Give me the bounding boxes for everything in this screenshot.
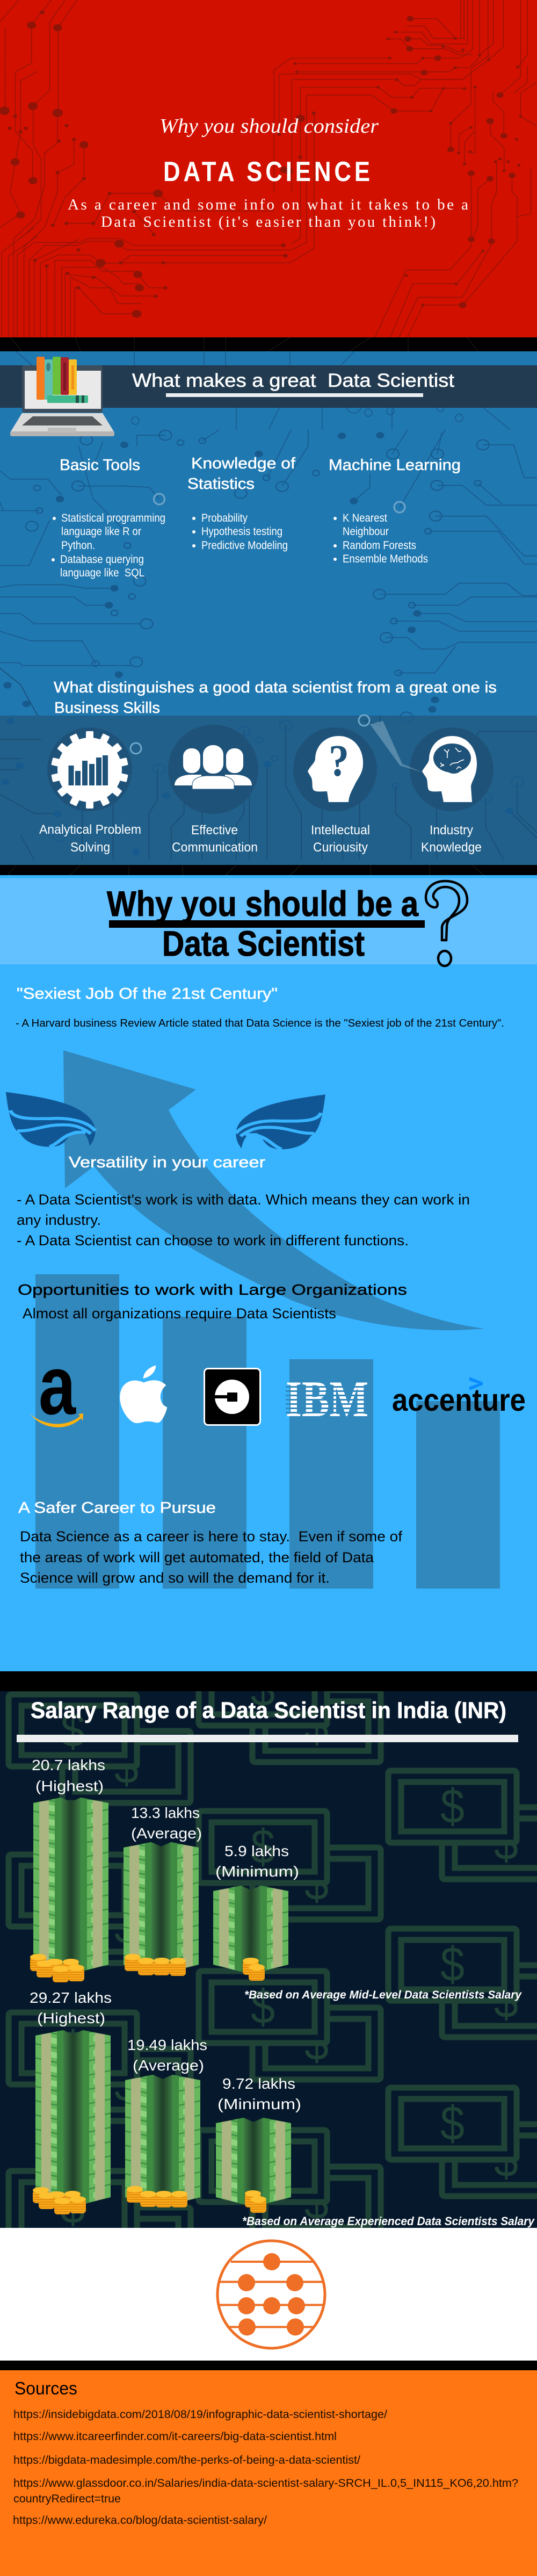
salary labels: experienced: 29.27 lakhs: [30, 1989, 112, 2006]
stack: 5.9 lakhs minimum: [213, 1886, 288, 1972]
panel: salary range: $: [494, 1974, 518, 2028]
salary labels: mid-level: 5.9 lakhs: [224, 1843, 289, 1859]
icon label: analytical problem solving: Analytical Problem: [39, 822, 141, 837]
column: knowledge of statistics: Predictive Modeling: [201, 539, 288, 552]
icon: people group: [175, 745, 252, 789]
stack: 19.49 lakhs average: [125, 2075, 200, 2204]
icon label: effective communication: Communication: [172, 840, 258, 855]
chart: mid-level salary money stacks: [30, 1798, 288, 1982]
decorative translucent sliver: [370, 721, 423, 773]
panel: what makes a great data scientist: [0, 351, 537, 865]
column: knowledge of statistics: Hypothesis testing: [201, 525, 282, 538]
panel: salary range: $: [251, 1980, 275, 2034]
safer career block: the areas of work will get automated, the field of Data: [20, 1549, 374, 1565]
panel: salary range: $: [114, 1900, 139, 1954]
panel: salary range: $: [304, 2017, 329, 2070]
column: basic tools: language like R or: [61, 525, 141, 538]
icon: head with question mark: ?: [329, 736, 349, 786]
sources heading: Sources: [14, 2378, 77, 2398]
safer career block: [18, 1499, 403, 1586]
heading: business skills: What distinguishes a good data scientist from a great one is: [54, 679, 497, 696]
salary labels: experienced: [30, 1989, 301, 2112]
logo: accenture: accenture: [392, 1383, 526, 1418]
versatility block: any industry.: [17, 1212, 101, 1228]
hero subtitle: As a career and some info on what it takes to be a: [68, 196, 468, 213]
salary labels: mid-level: (Minimum): [215, 1863, 299, 1880]
icon label: industry knowledge: [421, 823, 482, 855]
column: knowledge of statistics: [187, 455, 296, 552]
column: machine learning: Neighbour: [343, 525, 389, 538]
icon: head with brain: [422, 736, 477, 802]
icon label: industry knowledge: Industry: [430, 823, 473, 838]
icon: left wing: [6, 1092, 95, 1147]
column: basic tools: Python.: [61, 539, 95, 552]
panel: salary range: [0, 1691, 537, 2228]
logo: apple: [120, 1365, 167, 1423]
panel: salary range: $: [304, 2176, 329, 2229]
panel: sources: [0, 2370, 537, 2576]
icon: head with question mark: [308, 736, 363, 802]
sexiest job block: - A Harvard business Review Article stated that Data Science is the "Sexiest job of the 21st Century".: [16, 1018, 504, 1029]
opportunities block: Almost all organizations require Data Scientists: [23, 1305, 336, 1322]
icon: gear with bar chart: [51, 731, 128, 809]
source links: https://www.edureka.co/blog/data-scientist-salary/: [13, 2514, 267, 2527]
panel: why you should be a data scientist: [0, 875, 537, 1671]
icon: abacus globe: [217, 2241, 325, 2348]
versatility block: Versatility in your career: [69, 1154, 265, 1171]
source links: https://www.glassdoor.co.in/Salaries/india-data-scientist-salary-SRCH_IL.0,5_IN115_KO6,20.htm?: [13, 2477, 518, 2490]
column: knowledge of statistics: Statistics: [187, 475, 255, 493]
icon label: effective communication: [172, 823, 258, 855]
column: basic tools: language like SQL: [60, 567, 144, 579]
icon: right wing: [236, 1094, 325, 1149]
header band with heading: What makes a great Data Scientist: [132, 370, 454, 391]
panel: salary range: $: [494, 2133, 518, 2187]
column: machine learning: [329, 457, 461, 565]
icon: laptop with books: [10, 357, 114, 436]
hero kicker: Why you should consider: [159, 115, 379, 138]
stack: 9.72 lakhs minimum: [216, 2118, 291, 2204]
source links: https://insidebigdata.com/2018/08/19/infographic-data-scientist-shortage/: [13, 2408, 387, 2421]
salary labels: experienced: 9.72 lakhs: [222, 2075, 295, 2092]
panel: salary range: $: [494, 1816, 518, 1870]
panel: salary range: $: [61, 1864, 85, 1917]
panel: salary range: $: [61, 2022, 85, 2075]
safer career block: Data Science as a career is here to stay. Even if some of: [20, 1528, 403, 1545]
salary labels: experienced: (Average): [133, 2057, 204, 2074]
coins: mid-level stacks: [30, 1954, 265, 1982]
panel: salary range: $: [114, 2058, 139, 2112]
salary labels: experienced: (Highest): [37, 2010, 105, 2026]
stack: 13.3 lakhs average: [124, 1842, 199, 1972]
panel: salary range: $: [440, 1938, 465, 1991]
panel: salary range: $: [114, 2217, 139, 2270]
stack: 20.7 lakhs highest: [33, 1798, 108, 1972]
column: machine learning: Ensemble Methods: [343, 553, 428, 565]
panel: salary range: $: [440, 2097, 465, 2151]
source links: countryRedirect=true: [13, 2493, 121, 2505]
opportunities block: [18, 1281, 407, 1322]
icon label: effective communication: Effective: [191, 823, 238, 838]
stack: 29.27 lakhs highest: [35, 2030, 111, 2204]
versatility block: - A Data Scientist can choose to work in different functions.: [17, 1232, 409, 1249]
icon label: intellectual curiousity: Curiousity: [313, 840, 368, 855]
salary labels: mid-level: [32, 1757, 299, 1880]
panel: red hero header: [0, 0, 537, 337]
heading: business skills: [54, 679, 497, 717]
source links: https://bigdata-madesimple.com/the-perks-of-being-a-data-scientist/: [13, 2454, 360, 2466]
logo: amazon: a: [39, 1339, 76, 1432]
panel: salary range: $: [61, 1704, 85, 1757]
salary labels: experienced: 19.49 lakhs: [127, 2037, 207, 2053]
panel: salary range: $: [61, 2180, 85, 2234]
salary labels: mid-level: 20.7 lakhs: [32, 1757, 105, 1773]
icon circles backdrop: [47, 725, 494, 814]
opportunities block: Opportunities to work with Large Organizations: [18, 1281, 407, 1298]
hero subtitle: [68, 196, 468, 230]
heading band: Why you should be a: [107, 884, 419, 923]
column: basic tools: Database querying: [60, 553, 144, 566]
panel: salary range: $: [304, 1857, 329, 1910]
safer career block: A Safer Career to Pursue: [18, 1499, 216, 1517]
column: basic tools: [52, 457, 165, 579]
sexiest job block: "Sexiest Job Of the 21st Century": [17, 985, 278, 1002]
header band with heading: [0, 365, 537, 408]
icon label: industry knowledge: Knowledge: [421, 840, 482, 855]
panel: salary range: $: [114, 1740, 139, 1794]
icon label: intellectual curiousity: [311, 823, 370, 855]
source links: https://www.itcareerfinder.com/it-careers/big-data-scientist.html: [13, 2430, 337, 2443]
decorative chart: arrow and bars: [35, 1050, 500, 1589]
column: knowledge of statistics: Knowledge of: [191, 455, 296, 472]
column: basic tools: Statistical programming: [61, 512, 165, 524]
column: knowledge of statistics: Probability: [201, 512, 248, 524]
logo: uber: [204, 1369, 260, 1425]
icon: question mark outline: [426, 881, 467, 966]
coins: experienced stacks: [33, 2186, 266, 2214]
salary labels: mid-level: (Average): [131, 1825, 202, 1842]
heading band: [0, 878, 537, 964]
heading: business skills: Business Skills: [54, 699, 160, 717]
panel: salary range: $: [251, 1663, 275, 1716]
hero title: DATA SCIENCE: [163, 156, 373, 187]
chart: experienced salary money stacks: [33, 2030, 291, 2214]
panel: salary range: $: [251, 2139, 275, 2193]
salary heading: Salary Range of a Data Scientist in India (INR): [31, 1698, 506, 1723]
panel: salary range: $: [440, 1780, 465, 1834]
heading band: Data Scientist: [162, 923, 365, 963]
salary labels: mid-level: 13.3 lakhs: [131, 1805, 200, 1821]
salary heading: [17, 1698, 518, 1742]
column: basic tools: Basic Tools: [60, 457, 140, 474]
safer career block: Science will grow and so will the demand for it.: [20, 1570, 330, 1586]
column: machine learning: Random Forests: [343, 539, 416, 552]
versatility block: [17, 1154, 470, 1249]
versatility block: - A Data Scientist's work is with data. Which means they can work in: [17, 1192, 470, 1208]
panel: white logo strip: [0, 2228, 537, 2361]
footnote: mid-level: *Based on Average Mid-Level Data Scientists Salary: [244, 1989, 522, 2001]
source links: [13, 2408, 518, 2527]
salary labels: experienced: (Minimum): [217, 2096, 301, 2112]
logo: ibm: IBM: [286, 1370, 368, 1427]
icon label: intellectual curiousity: Intellectual: [311, 823, 370, 838]
icon label: analytical problem solving: [39, 822, 141, 855]
column: machine learning: Machine Learning: [329, 457, 461, 474]
panel: salary range: $: [304, 1699, 329, 1753]
column: machine learning: K Nearest: [343, 512, 387, 524]
sexiest job block: [16, 985, 504, 1029]
panel: salary range: $: [251, 1820, 275, 1874]
hero subtitle: Data Scientist (it's easier than you think!): [101, 213, 436, 230]
salary labels: mid-level: (Highest): [35, 1778, 104, 1794]
icon label: analytical problem solving: Solving: [70, 840, 110, 855]
